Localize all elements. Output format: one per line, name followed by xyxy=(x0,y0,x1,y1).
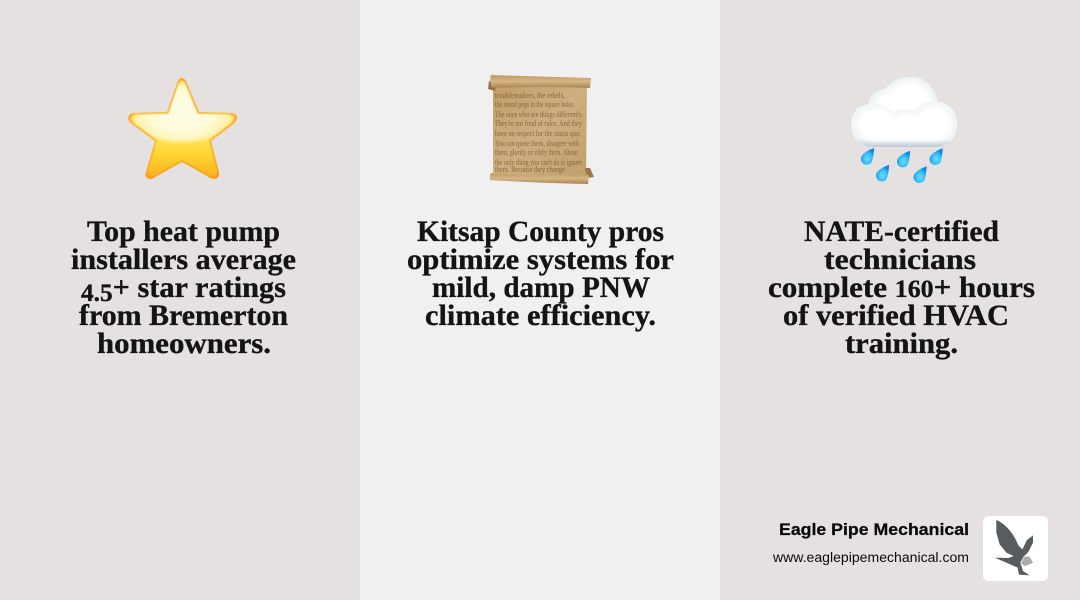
heading: star ratings: homeowners. xyxy=(97,327,271,360)
heading: star ratings: installers average xyxy=(71,243,296,276)
heading: star ratings: 4.5 xyxy=(81,280,113,307)
heading: NATE certification: training. xyxy=(845,327,958,360)
panel: NATE certification xyxy=(720,0,1080,600)
heading: NATE certification: complete 160+ hours xyxy=(768,271,1035,304)
panel: star ratings xyxy=(72,78,296,354)
icon: parchment scroll: the only thing you can't do is ignore xyxy=(495,158,582,167)
icon: parchment scroll: have no respect for the status quo. xyxy=(495,129,581,138)
heading: NATE certification xyxy=(768,215,1035,360)
heading: climate efficiency: mild, damp PNW xyxy=(432,271,650,304)
icon: parchment scroll: them. Because they change xyxy=(495,165,565,174)
heading: climate efficiency: Kitsap County pros xyxy=(417,215,664,248)
heading: star ratings: + star ratings xyxy=(113,271,286,304)
heading: NATE certification: NATE-certified xyxy=(804,215,999,248)
footer: company name and website: Eagle Pipe Mechanical xyxy=(779,521,969,539)
heading: climate efficiency: climate efficiency. xyxy=(425,299,656,332)
icon: parchment scroll: They're not fond of rules. And they xyxy=(495,119,582,128)
heading: climate efficiency xyxy=(407,215,674,332)
heading: NATE certification: of verified HVAC xyxy=(783,299,1009,332)
heading: star ratings: Top heat pump xyxy=(87,215,280,248)
icon: parchment scroll: troublemakers, the rebels, xyxy=(495,91,565,100)
heading: climate efficiency: optimize systems for xyxy=(407,243,674,276)
icon: star xyxy=(128,78,238,179)
icon: parchment scroll: the round pegs in the square holes. xyxy=(495,100,575,109)
icon: parchment scroll: You can quote them, disagree with xyxy=(495,139,579,148)
heading: star ratings xyxy=(71,215,296,360)
icon: parchment scroll: them, glorify or vilify them. About xyxy=(495,148,579,157)
icon: parchment scroll: The ones who see things differently. xyxy=(495,110,583,119)
icon: rain cloud xyxy=(851,77,957,183)
logo: eagle xyxy=(983,516,1048,581)
panel: climate efficiency xyxy=(360,0,720,600)
footer: company name and website: www.eaglepipemechanical.com xyxy=(772,550,969,565)
heading: NATE certification: technicians xyxy=(824,243,976,276)
icon: parchment scroll xyxy=(488,75,594,184)
footer: company name and website xyxy=(772,521,969,565)
heading: star ratings: from Bremerton xyxy=(79,299,288,332)
